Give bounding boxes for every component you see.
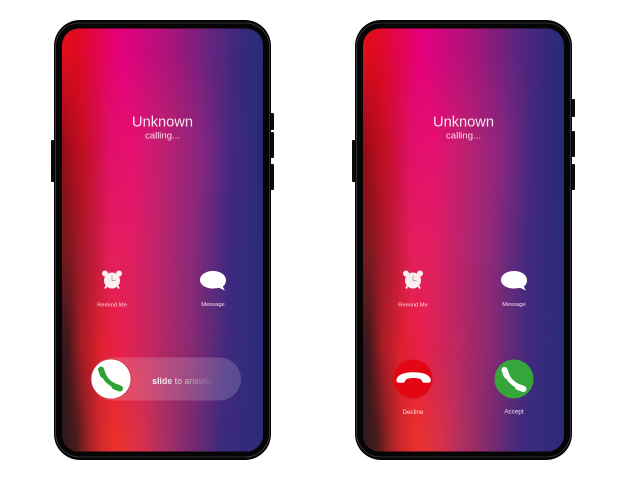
decline button (394, 360, 432, 398)
slider text: slide to answer (152, 376, 213, 386)
answer button (91, 359, 131, 399)
caller name: Unknown (433, 114, 494, 130)
side buttons (51, 113, 274, 190)
phone frame (355, 20, 572, 460)
calling status: calling... (145, 130, 180, 142)
screen gradient (363, 28, 564, 452)
calling status: calling... (446, 130, 481, 142)
slider track (91, 358, 241, 400)
label: remind me: Remind Me (97, 302, 127, 308)
icon: message bubble (200, 271, 226, 290)
icon: alarm clock (403, 270, 423, 288)
label: message: Message (201, 302, 225, 308)
label: remind me: Remind Me (398, 302, 428, 308)
phone: accept or decline (352, 20, 575, 460)
side buttons (352, 99, 575, 190)
label: decline: Decline (402, 409, 424, 416)
screen gradient (62, 28, 263, 452)
phone: slide to answer (51, 20, 274, 460)
phone frame (54, 20, 271, 460)
icon: alarm clock (102, 270, 122, 288)
icon: message bubble (501, 271, 527, 290)
accept button (494, 360, 534, 398)
label: accept: Accept (504, 408, 524, 416)
label: message: Message (502, 302, 526, 308)
caller name: Unknown (132, 114, 193, 130)
